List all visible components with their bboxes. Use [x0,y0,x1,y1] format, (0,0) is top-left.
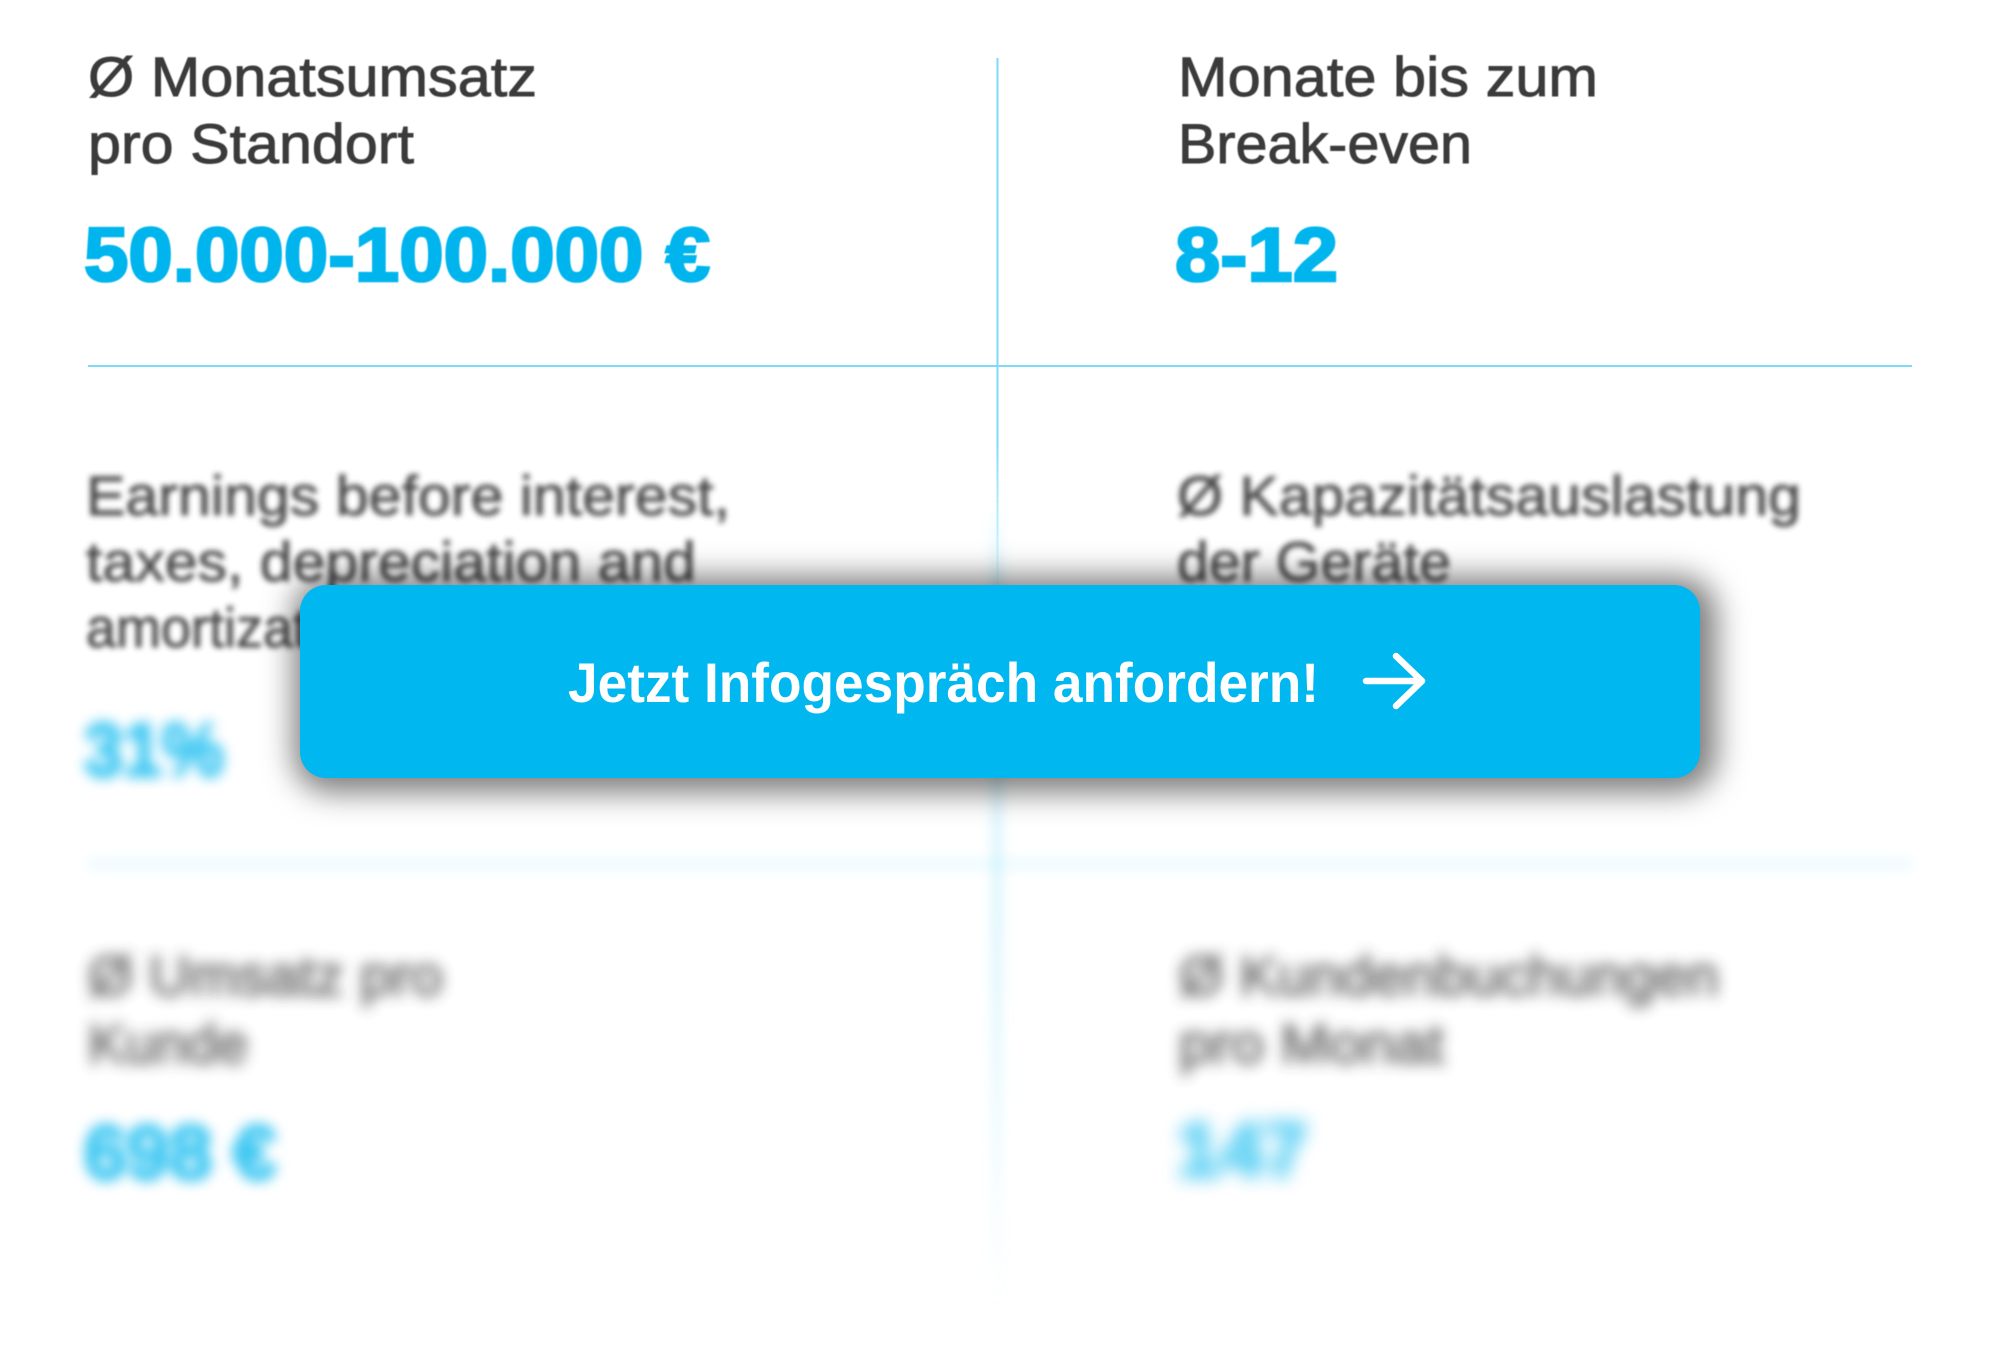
label: Break-even [1178,112,1472,175]
panel: Umsatz pro Kunde [84,944,443,1196]
label: pro Standort [88,112,414,175]
value: 50.000-100.000 € [84,213,710,298]
icon: arrow [1366,656,1422,706]
label: Ø Monatsumsatz [88,45,537,108]
label: Kunde [88,1012,248,1075]
panel: Monatsumsatz [84,45,710,298]
call-to-action button [300,585,1700,778]
panel: EBITDA [84,464,730,793]
label: pro Monat [1179,1012,1444,1075]
vertical divider [993,58,1001,1310]
value: 147 [1177,1108,1307,1193]
value: 8-12 [1175,213,1338,298]
label: Earnings before interest, [86,464,730,527]
value: 698 € [84,1111,276,1196]
horizontal divider: row 2 [88,858,1912,870]
label: amortization (EBITDA) [86,596,626,659]
label: Ø Kundenbuchungen [1179,944,1719,1007]
label: Monate bis zum [1178,45,1598,108]
label: taxes, depreciation and [86,530,696,593]
panel: Kundenbuchungen [1177,944,1719,1193]
label: der Geräte [1177,530,1451,593]
horizontal divider: row 1 [88,365,1912,367]
value: 31% [84,708,224,793]
panel: Break-even [1175,45,1598,298]
panel: Kapazitätsauslastung [1177,464,1801,593]
label: Ø Kapazitätsauslastung [1177,464,1801,527]
label: Ø Umsatz pro [88,944,443,1007]
button label: Jetzt Infogespräch anfordern! [568,651,1319,714]
